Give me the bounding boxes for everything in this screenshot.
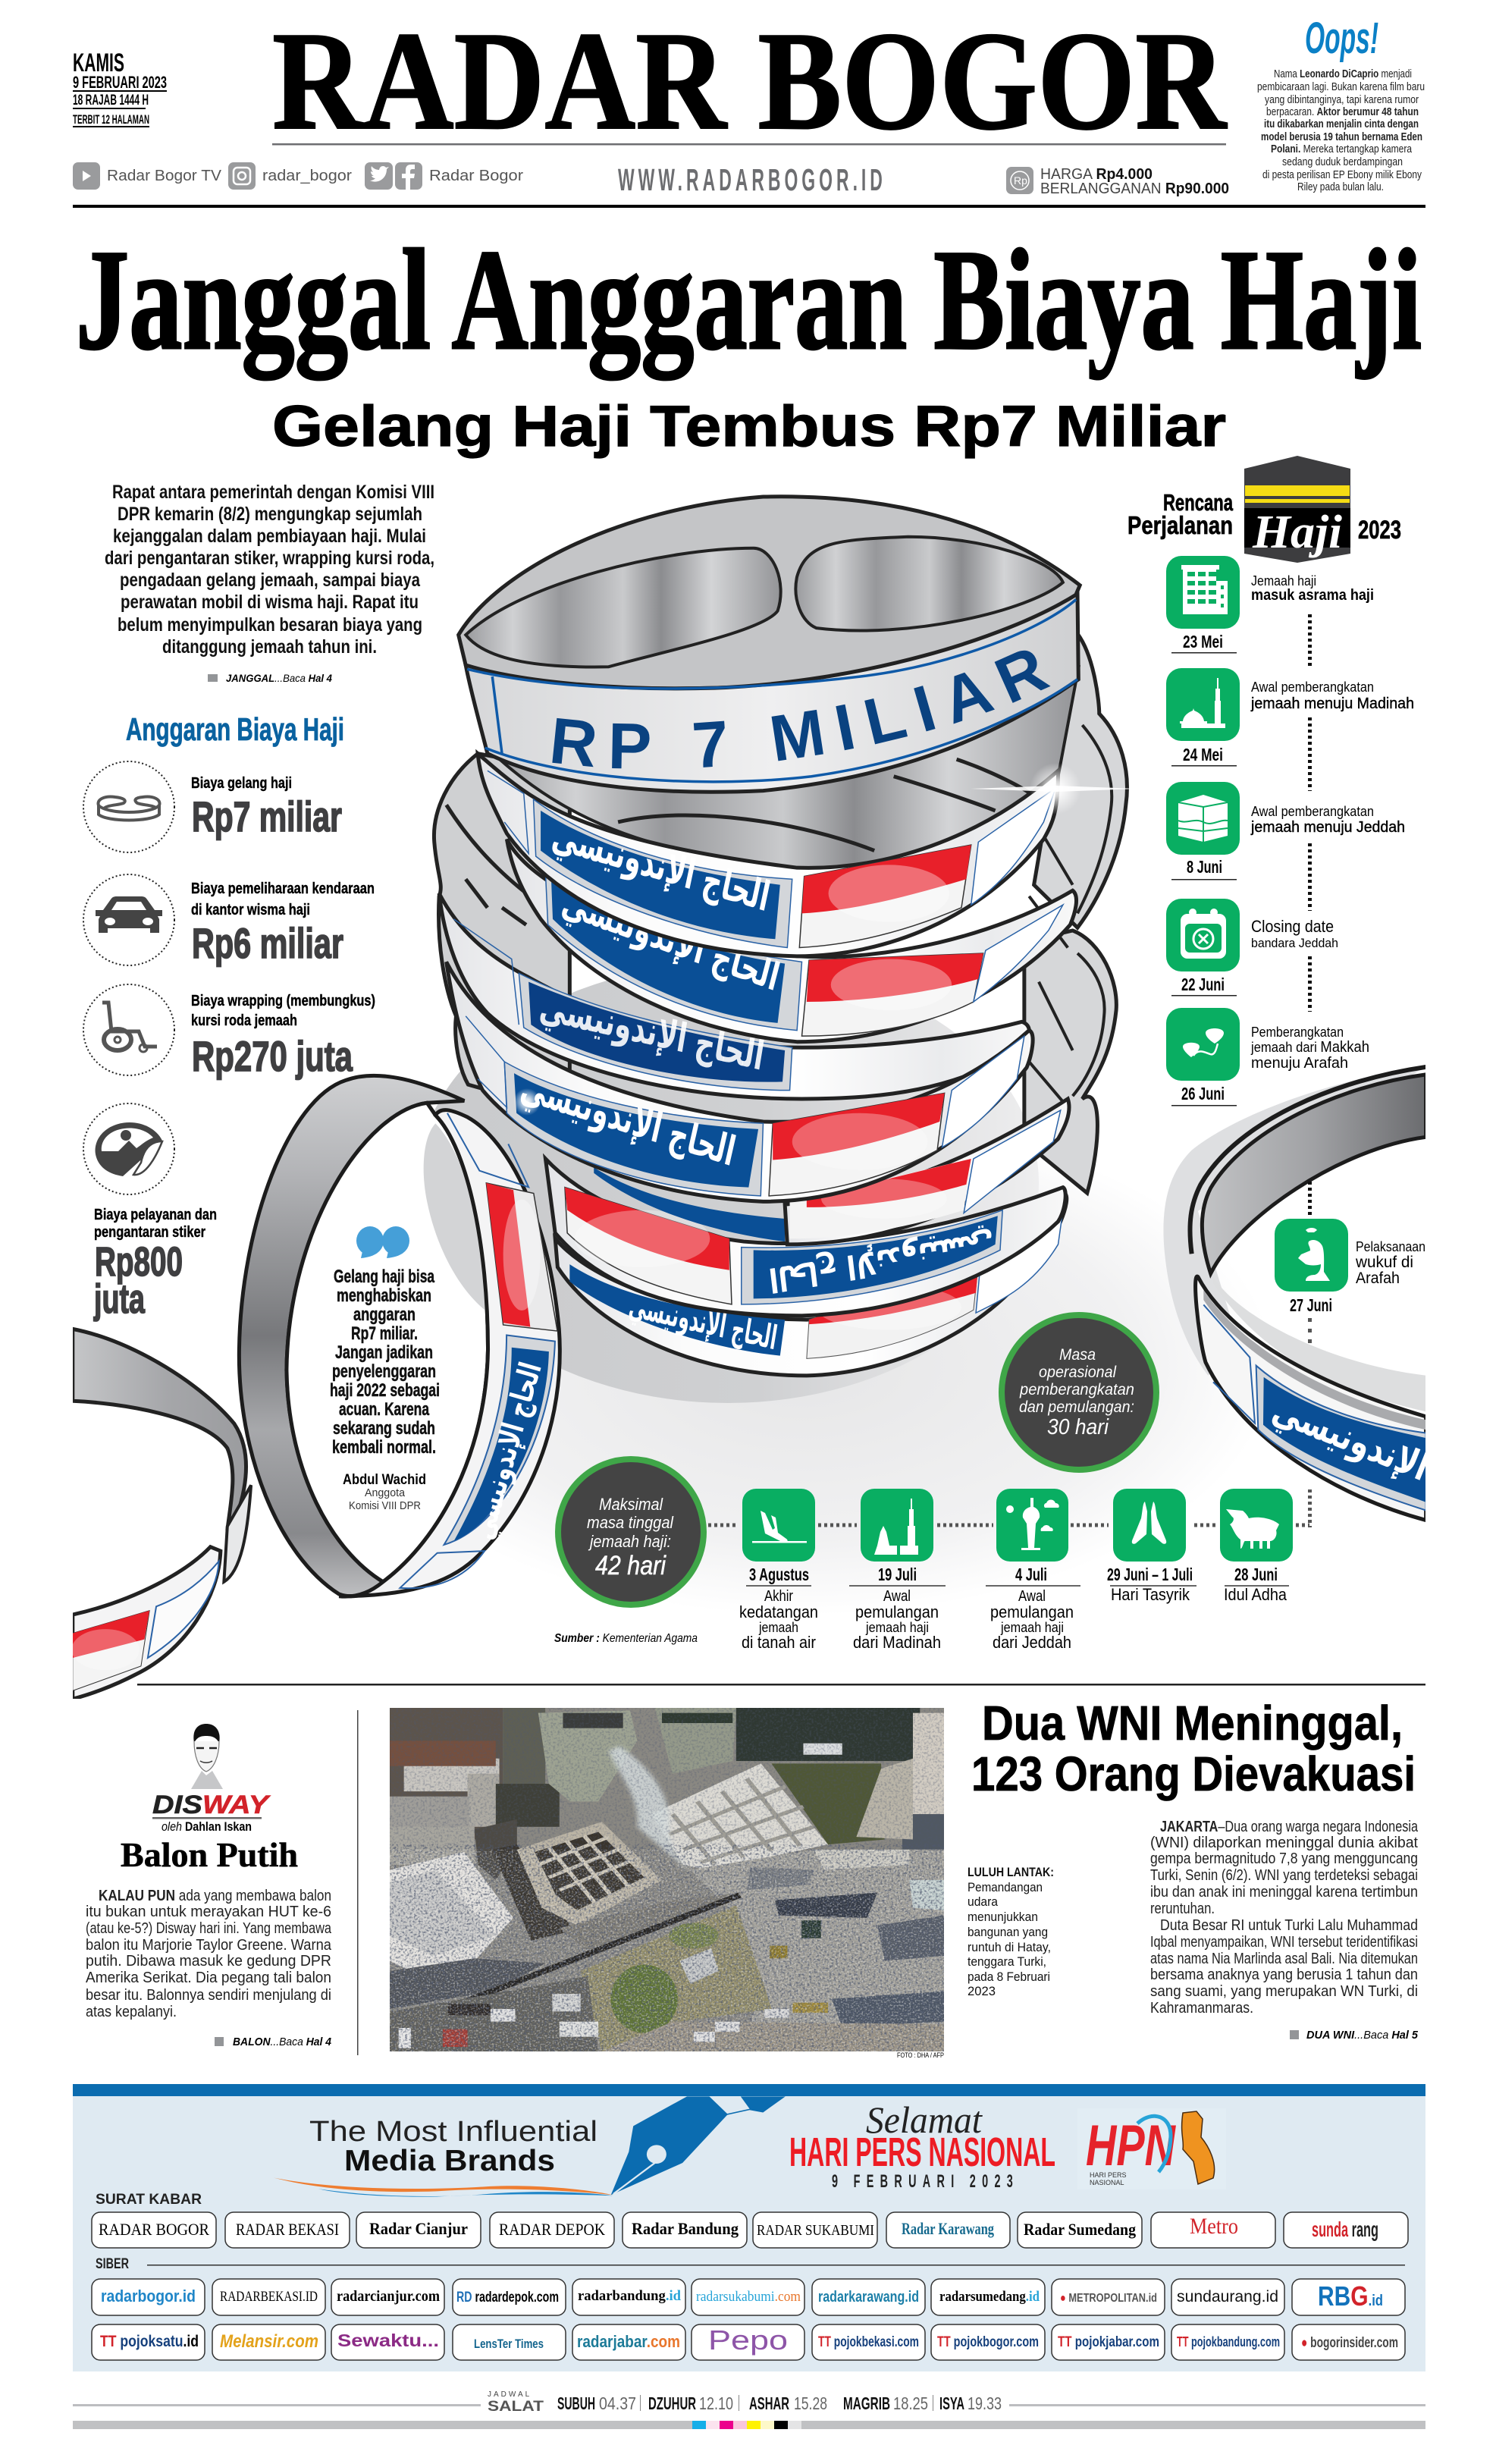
masthead rule [272, 143, 1226, 146]
quote text: haji 2022 sebagai [330, 1380, 440, 1401]
quote text: penyelenggaran [332, 1361, 436, 1382]
quote text [330, 1267, 440, 1458]
step: wukuf [1275, 1219, 1425, 1315]
story text: ibu dan anak ini meninggal karena tertimbun [1150, 1884, 1418, 1901]
newspaper logos row [92, 2212, 1408, 2248]
cost: sticker: pengantaran stiker [94, 1224, 205, 1241]
prayer times: 18.25 [893, 2393, 928, 2413]
banner top bar [73, 2084, 1425, 2096]
byline: oleh Dahlan Iskan [162, 1819, 252, 1834]
section rule [137, 1684, 1425, 1685]
step: idul adha: Idul Adha [1224, 1585, 1287, 1604]
story text: Turki, Senin (6/2). WNI yang terdeteksi sebagai [1150, 1867, 1418, 1884]
photo caption: Pemandangan [968, 1880, 1043, 1894]
newspaper logos row: Radar Karawang [902, 2219, 994, 2238]
online logos row 2: Pepo [708, 2324, 788, 2356]
Oops column: di pesta perilisan EP Ebony milik Ebony [1262, 169, 1422, 181]
callout: operational period: operasional [1039, 1364, 1117, 1381]
Oops column: Oops! [1305, 14, 1378, 63]
prayer times [557, 2393, 1002, 2413]
step: arrival: Akhir [764, 1588, 793, 1605]
prayer times: 04.37 [599, 2393, 636, 2413]
column text [86, 1888, 332, 2020]
newspaper logos row: RADAR BOGOR [99, 2220, 209, 2239]
story headline: 123 Orang Dievakuasi [971, 1747, 1416, 1801]
sparkle [513, 739, 1137, 1116]
intro paragraph [105, 482, 434, 658]
step: jeddah [1166, 782, 1405, 880]
tagline [309, 2116, 597, 2177]
newspaper logos row: Radar Cianjur [369, 2219, 468, 2238]
cost: bracelet: Rp7 miliar [192, 793, 342, 840]
quote attribution: Anggota [365, 1486, 406, 1499]
prayer schedule label [488, 2390, 544, 2415]
step: madinah: jemaah menuju Madinah [1250, 695, 1414, 712]
story text: reruntuhan. [1150, 1901, 1215, 1917]
online logos row 2: LensTer Times [474, 2337, 544, 2351]
Oops column: Polani. Mereka tertangkap kamera [1271, 143, 1413, 155]
quote text: acuan. Karena [339, 1399, 429, 1420]
online logos row 1: radarsukabumi.com [696, 2289, 801, 2305]
greeting: Hari Pers Nasional [789, 2098, 1055, 2192]
bracelet B: الحاج الإندونيسي [548, 811, 774, 921]
step: return madinah: Awal [883, 1588, 911, 1605]
photo caption [968, 1865, 1054, 1998]
prayer schedule rules [73, 2404, 1425, 2406]
media banner background [73, 2096, 1425, 2371]
intro paragraph: DPR kemarin (8/2) mengungkap sejumlah [118, 504, 422, 525]
callout: maximum stay: masa tinggal [587, 1513, 674, 1532]
step: asrama: 23 Mei [1183, 632, 1223, 651]
prayer times: ASHAR [749, 2393, 789, 2413]
step: wukuf: Arafah [1356, 1270, 1400, 1287]
photo caption: tenggara Turki, [968, 1954, 1046, 1969]
Oops column: berpacaran. Aktor berumur 48 tahun [1266, 106, 1419, 118]
quote attribution: Komisi VIII DPR [349, 1499, 421, 1512]
online logos row 1: RADARBEKASI.ID [220, 2289, 318, 2305]
step: asrama [1166, 556, 1374, 654]
online logos row 2: TT pojokjabar.com [1058, 2334, 1159, 2350]
online logos row 1: radarkarawang.id [818, 2289, 919, 2305]
HPN logo: HARI PERS [1090, 2171, 1127, 2179]
HPN logo: NASIONAL [1090, 2179, 1124, 2186]
online logos row 2: Sewaktu... [337, 2331, 439, 2350]
step: jeddah: 8 Juni [1187, 857, 1222, 877]
column text: KALAU PUN ada yang membawa balon [99, 1888, 331, 1904]
quote text: Gelang haji bisa [334, 1267, 434, 1287]
newspaper logos row: Radar Bandung [632, 2219, 739, 2238]
date block: 18 RAJAB 1444 H [73, 93, 149, 108]
step: asrama: masuk asrama haji [1251, 587, 1374, 604]
intro paragraph: belum menyimpulkan besaran biaya yang [118, 614, 422, 636]
cost: vehicle: Rp6 miliar [192, 919, 343, 967]
step: return madinah: dari Madinah [853, 1633, 941, 1652]
intro paragraph: kejanggalan dalam pembiayaan haji. Mulai [113, 526, 426, 547]
step: madinah: 24 Mei [1183, 745, 1223, 764]
greeting: Hari Pers Nasional: 9 FEBRUARI 2023 [832, 2171, 1013, 2192]
callout: operational period: Masa [1059, 1346, 1096, 1364]
step: return jeddah: 4 Juli [1015, 1565, 1047, 1584]
bracelet B [478, 754, 1058, 956]
greeting: Hari Pers Nasional: Selamat [866, 2098, 983, 2141]
step: return jeddah: Awal [1018, 1588, 1046, 1605]
column text: Amerika Serikat. Dia pegang tali balon [86, 1970, 331, 1986]
quote text: sekarang sudah [333, 1418, 435, 1439]
prayer times: ISYA [939, 2393, 964, 2413]
column text: putih. Dibawa masuk ke gedung DPR [86, 1953, 331, 1970]
online logos row 1: RBG.id [1318, 2280, 1383, 2312]
callout: maximum stay: 42 hari [595, 1551, 666, 1580]
HPN logo: HPN [1086, 2114, 1177, 2178]
photo caption: udara [968, 1894, 998, 1909]
source: Sumber : Kementerian Agama [554, 1632, 698, 1645]
lowest bracelet: الحاج الإندونيسي [626, 1285, 780, 1358]
online logos row 1: radarcianjur.com [337, 2288, 440, 2305]
step: tasyrik: 29 Juni – 1 Juli [1107, 1565, 1193, 1584]
column divider [357, 1710, 358, 2055]
bracelet C [507, 840, 1077, 1042]
step: return jeddah: dari Jeddah [993, 1633, 1071, 1652]
Oops column: pembicaraan lagi. Bukan karena film baru [1257, 81, 1425, 93]
timeline dots [708, 614, 1310, 1527]
photo caption: LULUH LANTAK: [968, 1865, 1054, 1879]
bracelet D band: الحاج الإندونيسي [537, 983, 767, 1080]
prayer times: SUBUH [557, 2393, 595, 2413]
quote text: Jangan jadikan [335, 1342, 433, 1363]
story text: Iqbal menyampaikan, WNI tersebut teridentifikasi [1150, 1934, 1418, 1951]
step: idul adha: 28 Juni [1234, 1565, 1278, 1584]
step: arafah route [1166, 1008, 1369, 1106]
prayer times: 15.28 [794, 2393, 827, 2413]
step: tasyrik [1107, 1489, 1196, 1604]
intro paragraph: ditanggung jemaah tahun ini. [162, 636, 377, 658]
callout: operational period: dan pemulangan: [1019, 1398, 1134, 1416]
cost: wheelchair wrapping: Rp270 juta [192, 1032, 353, 1080]
price block: Rp [1014, 174, 1027, 187]
online logos row 2: TT pojokbandung.com [1177, 2334, 1280, 2349]
online logos row 1: radarbandung.id [578, 2288, 681, 2304]
step: arrival: di tanah air [742, 1633, 816, 1652]
online logos row 2: radarjabar.com [577, 2332, 680, 2351]
bracelet F [594, 1099, 1069, 1245]
story headline [971, 1696, 1416, 1801]
bracelet E: الحاج الإندونيسي [516, 1062, 740, 1176]
journey heading: 2023 [1358, 516, 1401, 545]
callout: operational period [1002, 1315, 1156, 1470]
step: wukuf: wukuf di [1355, 1254, 1413, 1271]
swoosh [274, 2178, 613, 2197]
prayer times: MAGRIB [843, 2393, 890, 2413]
cost: sticker: Rp800 [95, 1239, 183, 1285]
date block: KAMIS [73, 49, 124, 77]
siber label: SIBER [96, 2256, 129, 2272]
photo caption: menunjukkan [968, 1910, 1038, 1924]
step: return jeddah [986, 1489, 1080, 1652]
upper stack [459, 497, 1080, 1042]
Oops column [1257, 14, 1425, 193]
gray inside of top stack [488, 668, 1078, 868]
cost: sticker: Biaya pelayanan dan [94, 1207, 217, 1223]
intro paragraph: Rapat antara pemerintah dengan Komisi VIII [112, 482, 434, 503]
icon: bracelet [83, 761, 174, 852]
HPN logo [1077, 2108, 1226, 2189]
bracelet inscription: RP 7 MILIAR: RP 7 MILIAR [552, 651, 1051, 769]
date block: 9 FEBRUARI 2023 [73, 73, 167, 92]
step: wukuf: 27 Juni [1290, 1295, 1332, 1315]
newspaper logos row: Radar Sumedang [1024, 2220, 1136, 2239]
stacked bracelets [434, 634, 1127, 1376]
social media row: radar_bogor [262, 168, 352, 184]
newspaper logos row: RADAR BEKASI [236, 2220, 339, 2239]
intro paragraph: perawatan mobil di wisma haji. Rapat itu [121, 592, 419, 613]
read more: balon: BALON...Baca Hal 4 [233, 2036, 332, 2048]
story text: gempa bermagnitudo 7,8 yang mengguncang [1150, 1850, 1418, 1867]
story text: bersama anaknya yang berusia 1 tahun dan [1150, 1966, 1418, 1983]
bracelet C: الحاج الإندونيسي [557, 880, 784, 1000]
step: arrival: jemaah [758, 1620, 798, 1635]
Oops column: itu dikabarkan menjalin cinta dengan [1264, 118, 1419, 130]
greeting: Hari Pers Nasional: HARI PERS NASIONAL [789, 2130, 1055, 2175]
tagline: Media Brands [344, 2145, 555, 2177]
right bracelet [1163, 1065, 1425, 1522]
bracelet inscription: standing: الحاج الإندونيسي [465, 1358, 549, 1543]
story text: sang suami, yang merupakan WN Turki, di [1150, 1983, 1418, 2000]
Oops column: Riley pada bulan lalu. [1297, 181, 1384, 193]
online logos row 2 [92, 2324, 1405, 2360]
step: arafah route: Pemberangkatan [1251, 1025, 1344, 1040]
prayer times: 19.33 [968, 2393, 1002, 2413]
step: return jeddah: pemulangan [990, 1602, 1074, 1621]
callout: maximum stay: Maksimal [599, 1495, 663, 1514]
disway logo: DIS WAY [152, 1791, 271, 1819]
photo credit: FOTO : DHA / AFP [897, 2051, 944, 2059]
step: tasyrik: Hari Tasyrik [1111, 1585, 1190, 1604]
callout: operational period: 30 hari [1047, 1415, 1109, 1439]
step: arafah route: 26 Juni [1181, 1084, 1225, 1103]
quote text: kembali normal. [332, 1437, 436, 1458]
masthead title: RADAR BOGOR [272, 3, 1227, 159]
date block [73, 49, 167, 127]
online logos row 1: RD radardepok.com [456, 2290, 559, 2305]
reversed bracelet: الحاج الإندونيسي [767, 1224, 996, 1300]
intro paragraph: pengadaan gelang jemaah, sampai biaya [120, 570, 421, 591]
callout: maximum stay [558, 1459, 704, 1605]
read more: dua wni: DUA WNI...Baca Hal 5 [1306, 2029, 1419, 2042]
quote attribution: Abdul Wachid [343, 1472, 426, 1488]
photo caption: 2023 [968, 1984, 996, 1998]
cost: sticker: juta [93, 1276, 146, 1322]
bracelet E [447, 962, 1033, 1201]
step: closing date: bandara Jeddah [1251, 936, 1338, 950]
quote text: Rp7 miliar. [351, 1323, 418, 1344]
Oops column: sedang duduk berdampingan [1282, 156, 1403, 168]
story text: atas nama Nia Marlinda asal Bali. Nia ditemukan [1150, 1951, 1418, 1967]
column text: atas kepalanyi. [86, 2004, 177, 2020]
journey heading: Rencana [1163, 489, 1234, 516]
date block: TERBIT 12 HALAMAN [73, 112, 149, 127]
quote text: anggaran [353, 1304, 416, 1325]
step: idul adha [1220, 1489, 1293, 1604]
tagline: The Most Influential [309, 2116, 597, 2148]
story text [1150, 1819, 1419, 2017]
quote text: menghabiskan [337, 1285, 431, 1306]
online logos row 2: TT pojokbogor.com [937, 2334, 1039, 2350]
callout: maximum stay: jemaah haji: [588, 1532, 671, 1551]
Oops column: yang dibintanginya, tapi karena rumor [1265, 94, 1419, 106]
cost: bracelet [191, 775, 342, 840]
social media row [73, 162, 523, 190]
step: arrival: kedatangan [739, 1602, 818, 1621]
step: return jeddah: jemaah haji [1000, 1620, 1064, 1635]
icon: car [83, 874, 174, 965]
online logos row 1: radarbogor.id [101, 2287, 196, 2305]
journey heading [1127, 489, 1401, 545]
photo caption: bangunan yang [968, 1925, 1048, 1939]
step: closing date: 22 Juni [1181, 975, 1225, 994]
story text: JAKARTA–Dua orang warga negara Indonesia [1160, 1819, 1419, 1835]
social media row: Radar Bogor [429, 168, 523, 184]
cost: wheelchair wrapping [191, 993, 375, 1080]
online logos row 2: ● bogorinsider.com [1301, 2335, 1398, 2351]
cost: wheelchair wrapping: Biaya wrapping (membungkus) [191, 993, 375, 1009]
photo caption: runtuh di Hatay, [968, 1940, 1051, 1954]
header rule [73, 205, 1425, 208]
icon: kaaba [1244, 456, 1350, 563]
cost: bracelet: Biaya gelang haji [191, 775, 292, 792]
cost: vehicle: Biaya pemeliharaan kendaraan [191, 880, 375, 897]
bottom registration bar [73, 2421, 1425, 2429]
column text: balon itu Marjorie Taylor Greene. Warna [86, 1937, 332, 1954]
cost: vehicle [191, 880, 375, 967]
cost: vehicle: di kantor wisma haji [191, 902, 310, 918]
step: return madinah: pemulangan [855, 1602, 939, 1621]
step: arafah route: jemaah dari Makkah [1250, 1039, 1369, 1056]
column text: itu bukan untuk merayakan HUT ke-6 [86, 1904, 331, 1920]
top bracelet interior [459, 497, 1080, 689]
reversed bracelet [545, 1159, 1065, 1316]
Oops column: Nama Leonardo DiCaprio menjadi [1274, 68, 1412, 80]
online logos row 1: ● METROPOLITAN.id [1060, 2292, 1157, 2305]
step: arrival [739, 1489, 818, 1652]
read more: janggal: JANGGAL...Baca Hal 4 [226, 672, 332, 684]
column text: (atau ke-5?) Disway hari ini. Yang membawa [86, 1920, 332, 1937]
Oops column: model berusia 19 tahun bernama Eden [1261, 131, 1422, 143]
lowest bracelet [555, 1193, 1067, 1376]
newspaper logos row: sunda rang [1312, 2218, 1378, 2241]
callout: operational period: pemberangkatan [1019, 1381, 1134, 1398]
icon: sticker [83, 1103, 174, 1194]
cost: wheelchair wrapping: kursi roda jemaah [191, 1012, 297, 1029]
online logos row 1 [92, 2279, 1405, 2315]
online logos row 2: Melansir.com [220, 2331, 318, 2352]
intro paragraph: dari pengantaran stiker, wrapping kursi roda, [105, 548, 434, 569]
step: closing date [1166, 899, 1338, 997]
website address: WWW.RADARBOGOR.ID [618, 163, 883, 198]
budget heading: Anggaran Biaya Haji [126, 711, 344, 747]
bracelet D band [439, 893, 1030, 1099]
story text: Kahramanmaras. [1150, 2000, 1253, 2017]
prayer schedule label: JADWAL [488, 2390, 532, 2399]
step: wukuf: Pelaksanaan [1356, 1239, 1425, 1254]
photo caption: pada 8 Februari [968, 1970, 1050, 1984]
online logos row 2: TT pojoksatu.id [100, 2333, 199, 2350]
online logos row 1: radarsumedang.id [939, 2289, 1040, 2305]
step: return madinah: 19 Juli [878, 1565, 917, 1584]
quote attribution [343, 1472, 426, 1512]
prayer schedule label: SALAT [488, 2399, 544, 2415]
column text: besar itu. Balonnya sendiri menjulang di [86, 1987, 331, 2004]
price block: BERLANGGANAN Rp90.000 [1040, 180, 1229, 197]
photo: earthquake aftermath [390, 1708, 944, 2051]
icon: kaaba: Haji [1252, 507, 1342, 558]
online logos row 2: TT pojokbekasi.com [818, 2334, 919, 2350]
step: madinah [1166, 668, 1414, 766]
prayer times: 12.10 [699, 2393, 733, 2413]
left bottom bracelet [71, 1329, 251, 1699]
story text: (WNI) dilaporkan meninggal dunia akibat [1150, 1835, 1418, 1851]
step: madinah: Awal pemberangkatan [1251, 680, 1374, 695]
cost: sticker [93, 1207, 217, 1322]
newspaper logos row: Metro [1190, 2214, 1238, 2239]
step: return madinah [849, 1489, 946, 1652]
newspaper logos row: RADAR DEPOK [499, 2220, 605, 2239]
step: closing date: Closing date [1251, 917, 1334, 936]
portrait: Dahlan Iskan [191, 1724, 223, 1789]
stack shadow [334, 963, 1274, 1615]
step: arafah route: menuju Arafah [1251, 1055, 1348, 1072]
step: asrama: Jemaah haji [1251, 573, 1316, 589]
story headline: Dua WNI Meninggal, [982, 1696, 1403, 1750]
story text: Duta Besar RI untuk Turki Lalu Muhammad [1160, 1917, 1418, 1934]
price block [1006, 166, 1229, 197]
icon: wheelchair [83, 984, 174, 1075]
top bracelet blue lines [467, 599, 1077, 782]
top bracelet front [466, 594, 1078, 792]
icon: pen nib [611, 2096, 786, 2195]
subheadline: Gelang Haji Tembus Rp7 Miliar [272, 394, 1226, 459]
social media row: Radar Bogor TV [107, 168, 222, 184]
standing bracelet [239, 1075, 560, 1596]
price block: HARGA Rp4.000 [1040, 166, 1153, 183]
online logos row 1: sundaurang.id [1177, 2288, 1278, 2305]
column title: Balon Putih [121, 1835, 298, 1874]
prayer times: DZUHUR [648, 2393, 696, 2413]
step: jeddah: Awal pemberangkatan [1251, 804, 1374, 819]
quote marks [356, 1226, 409, 1258]
step: arrival: 3 Agustus [749, 1565, 809, 1584]
surat kabar label: SURAT KABAR [96, 2192, 202, 2208]
journey heading: Perjalanan [1127, 511, 1233, 539]
step: return madinah: jemaah haji [865, 1620, 929, 1635]
newspaper logos row: RADAR SUKABUMI [757, 2222, 874, 2239]
step: jeddah: jemaah menuju Jeddah [1250, 819, 1405, 836]
